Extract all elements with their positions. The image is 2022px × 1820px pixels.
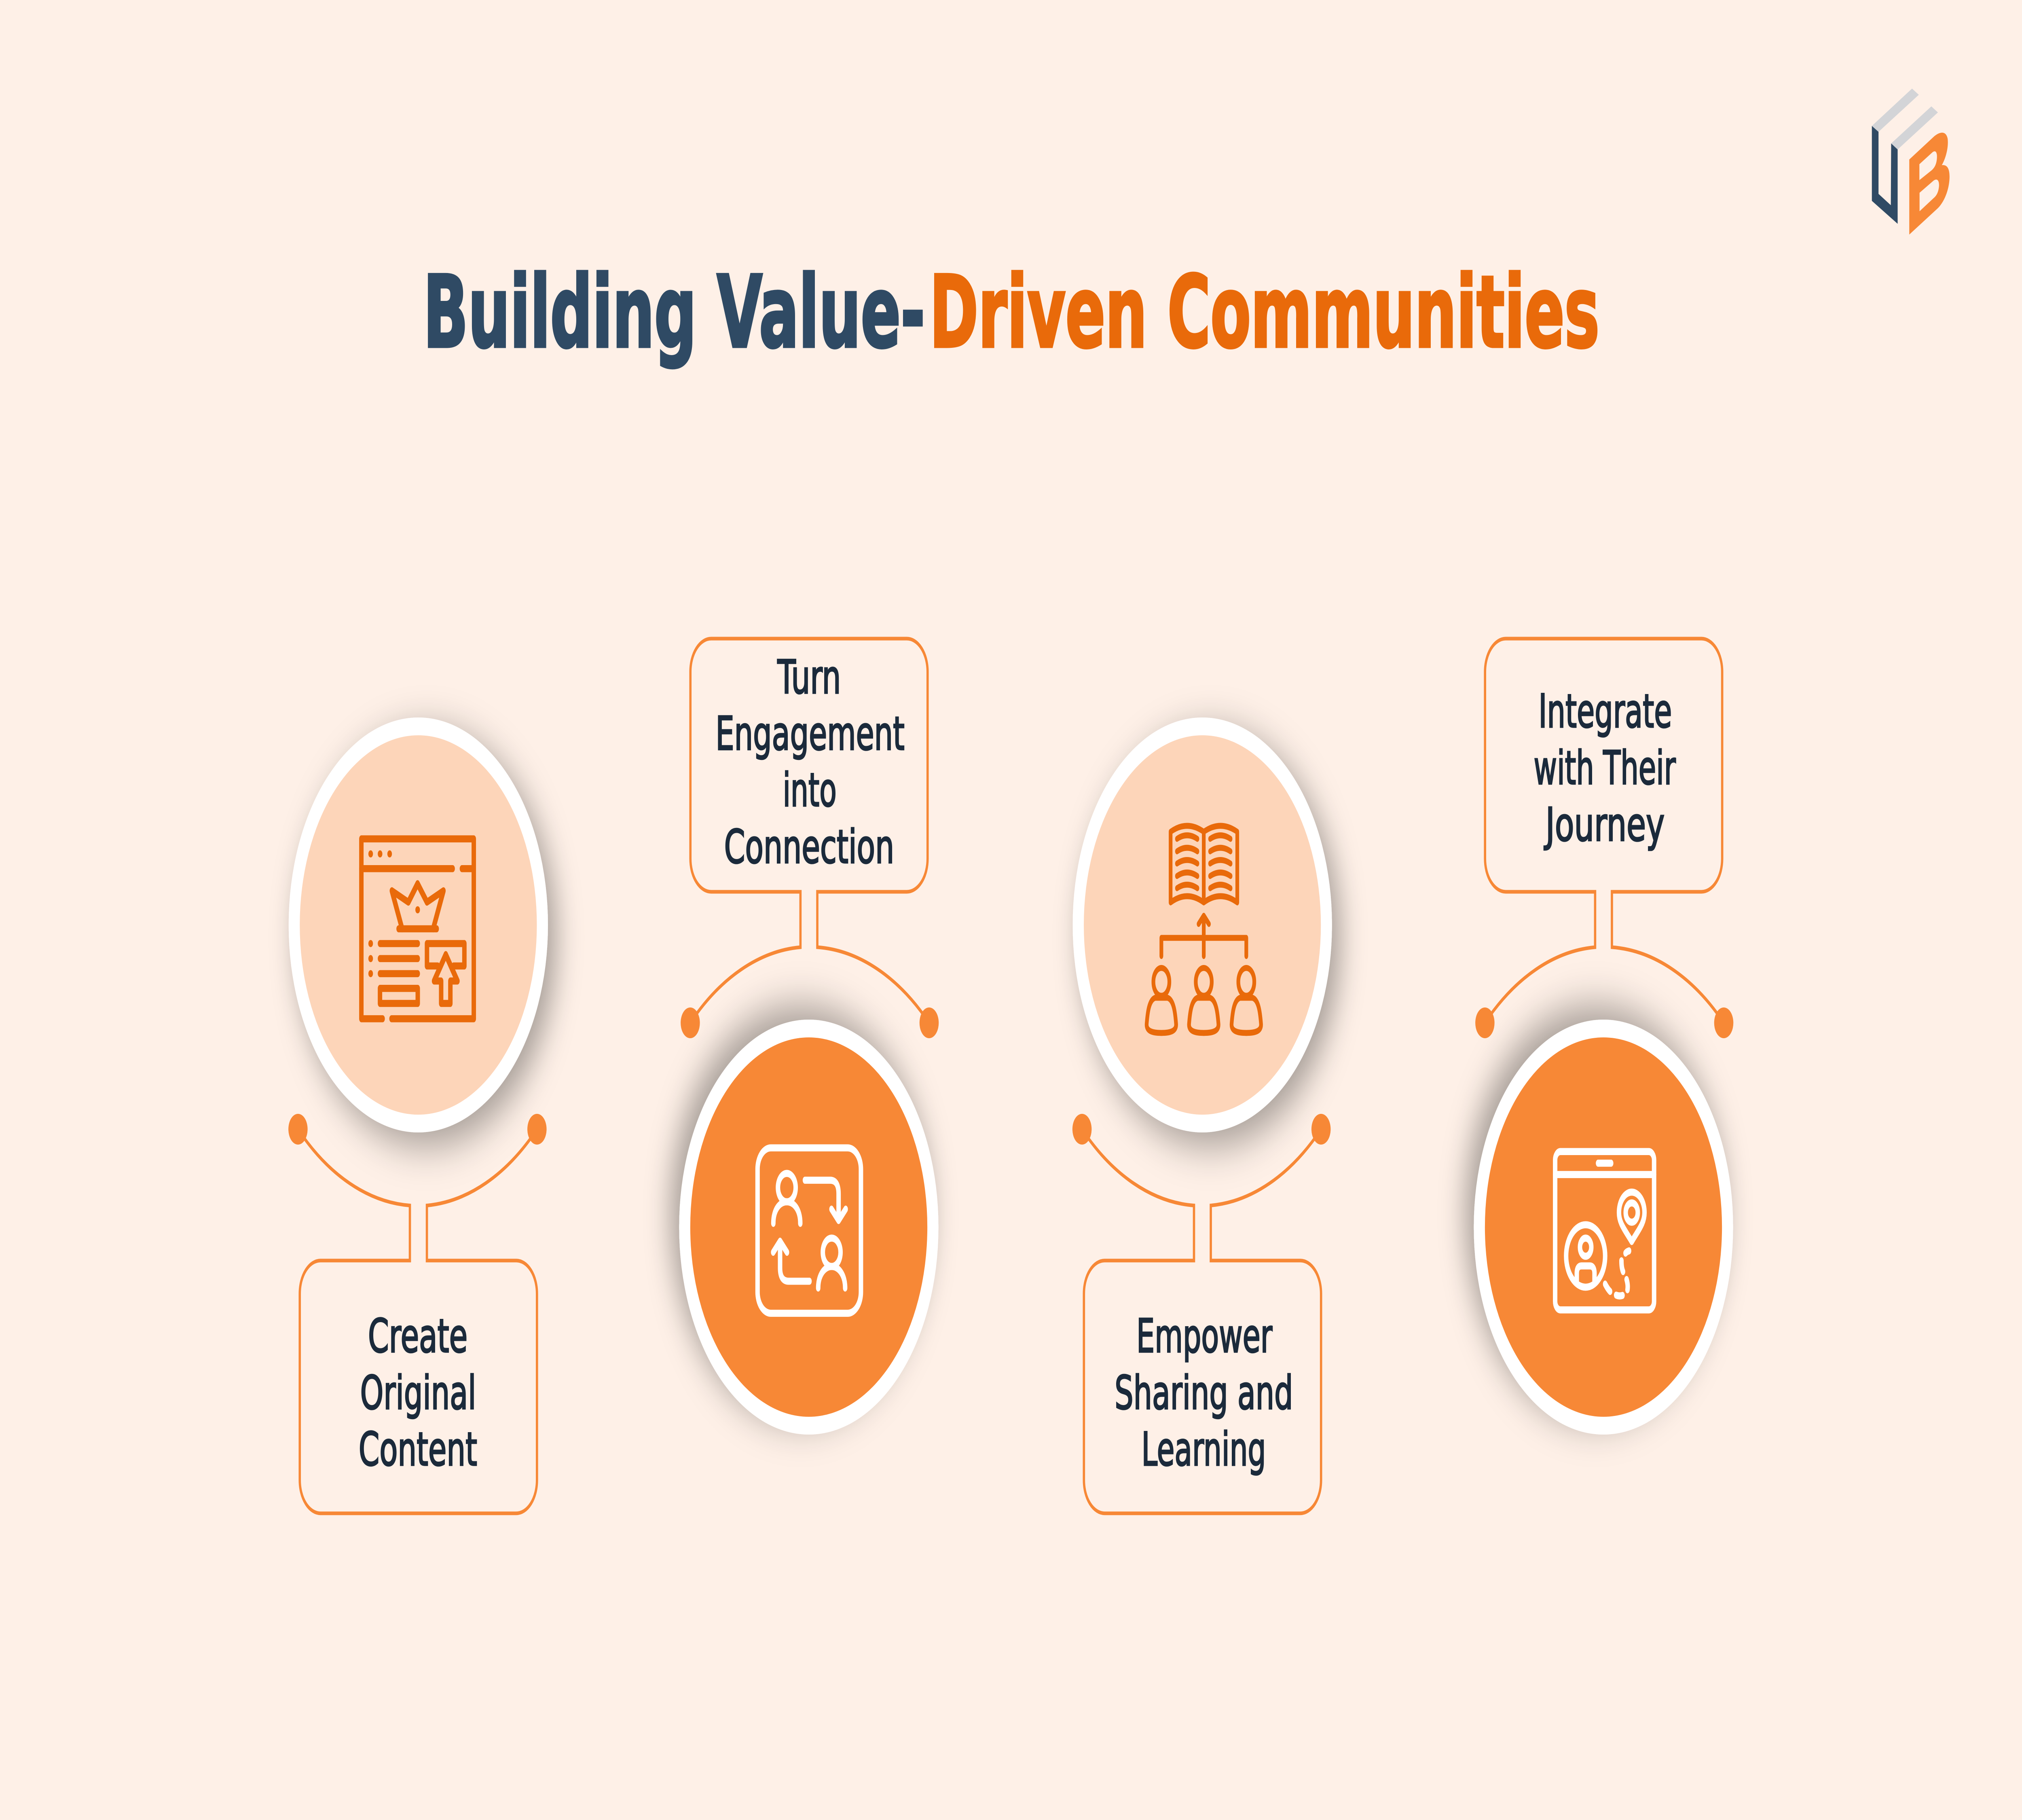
icon: browser window with crown and upload arrow — [362, 839, 474, 1019]
label 3: Learning — [1141, 1423, 1266, 1477]
label 1 — [359, 1310, 477, 1477]
callout connector and box 2 — [690, 639, 929, 1023]
logo — [1872, 89, 1950, 235]
circle 1 — [289, 717, 548, 1132]
title — [423, 255, 1599, 370]
label 2 — [715, 651, 905, 874]
title: Driven Communities — [930, 255, 1599, 370]
label 1: Content — [359, 1423, 477, 1477]
connector dots 2 — [681, 1007, 939, 1038]
label 2: Turn — [777, 651, 841, 705]
label 2: into — [783, 764, 837, 817]
icon: window with user journey to pin — [1555, 1151, 1654, 1310]
callout connector and box 3 — [1082, 1129, 1321, 1513]
step 2: turn engagement into connection — [679, 639, 939, 1435]
connector dots 4 — [1475, 1007, 1733, 1038]
circle 2 — [679, 1020, 939, 1435]
step 1: create original content — [288, 717, 548, 1513]
callout connector and box 4 — [1485, 639, 1724, 1023]
circle 3 — [1072, 717, 1332, 1132]
label 2: Engagement — [715, 707, 905, 761]
step 4: integrate with their journey — [1474, 639, 1733, 1435]
connector dots 3 — [1072, 1114, 1330, 1145]
callout connector and box 1 — [298, 1129, 537, 1513]
label 4: with Their — [1533, 742, 1676, 795]
label 4: Journey — [1544, 798, 1665, 852]
label 3: Empower — [1136, 1310, 1273, 1363]
circle 4 — [1474, 1020, 1733, 1435]
title: Building Value- — [423, 255, 925, 370]
label 1: Create — [368, 1310, 467, 1363]
icon: two people exchanging — [757, 1148, 861, 1313]
label 3: Sharing and — [1115, 1367, 1293, 1420]
label 1: Original — [360, 1367, 476, 1420]
connector dots 1 — [288, 1114, 547, 1145]
label 3 — [1115, 1310, 1293, 1477]
label 2: Connection — [724, 821, 894, 874]
icon: book above three people — [1146, 826, 1261, 1033]
label 4 — [1533, 685, 1676, 852]
label 4: Integrate — [1538, 685, 1672, 739]
step 3: empower sharing and learning — [1072, 717, 1332, 1513]
